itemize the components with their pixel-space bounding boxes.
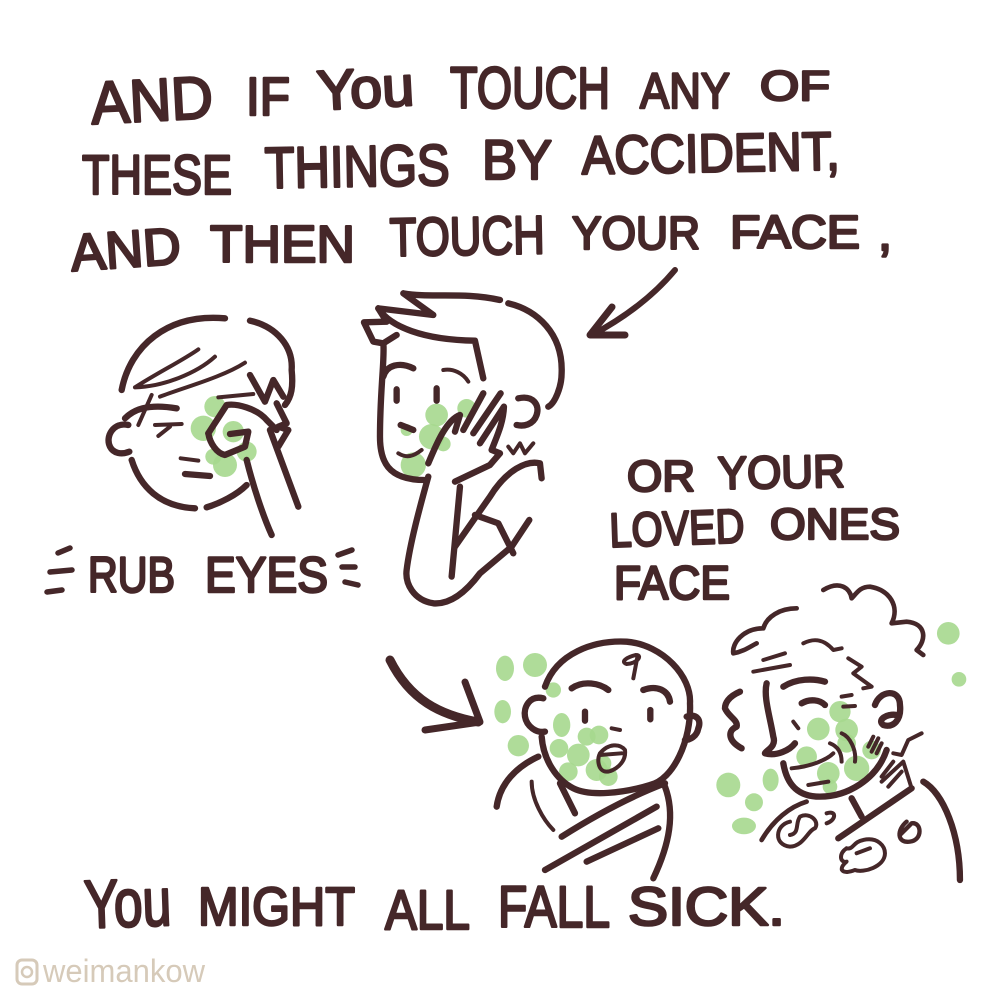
text: you might all fall sick: You	[83, 864, 172, 943]
heading: and if you touch any of these things by accident: AND	[69, 217, 183, 283]
text: or your loved ones face: YOUR	[717, 445, 845, 499]
heading: and if you touch any of these things by accident: AND	[89, 64, 215, 137]
text: you might all fall sick: MIGHT	[198, 877, 355, 937]
heading: and if you touch any of these things by accident: BY	[482, 128, 552, 191]
illustration: boy touching face	[364, 293, 562, 603]
text: or your loved ones face: ONES	[770, 500, 900, 549]
watermark: instagram handle: weimankow	[42, 953, 206, 989]
heading: and if you touch any of these things by accident: THESE	[82, 143, 232, 206]
illustration: person rubbing eyes	[109, 318, 298, 535]
text: or your loved ones face: FACE	[614, 556, 730, 609]
heading: and if you touch any of these things by accident: FACE	[730, 206, 860, 258]
heading: and if you touch any of these things by accident: ACCIDENT,	[581, 122, 840, 186]
heading: and if you touch any of these things by accident: OF	[760, 62, 830, 109]
text: or your loved ones face: OR	[627, 452, 695, 501]
heading: and if you touch any of these things by accident: IF	[246, 67, 290, 127]
text: you might all fall sick: FALL	[498, 875, 610, 940]
arrow: pointing to baby	[390, 660, 480, 730]
label: rub eyes	[47, 547, 358, 603]
heading: and if you touch any of these things by accident	[69, 54, 892, 283]
heading: and if you touch any of these things by accident: YOUR	[572, 207, 700, 259]
heading: and if you touch any of these things by accident: You	[315, 54, 415, 122]
text: or your loved ones face	[609, 445, 900, 609]
text: you might all fall sick: ALL	[385, 878, 470, 941]
heading: and if you touch any of these things by accident: ,	[878, 205, 892, 261]
heading: and if you touch any of these things by accident: THINGS	[264, 133, 450, 201]
illustration: baby with germs	[494, 642, 699, 878]
label: rub eyes: EYES	[205, 547, 328, 603]
heading: and if you touch any of these things by accident: TOUCH	[389, 205, 545, 268]
label: rub eyes: RUB	[88, 547, 175, 603]
heading: and if you touch any of these things by accident: THEN	[210, 216, 355, 274]
text: you might all fall sick: SICK.	[628, 877, 785, 937]
arrow: pointing to boy's face	[590, 270, 675, 335]
heading: and if you touch any of these things by accident: ANY	[640, 63, 730, 119]
illustration: older woman with germs	[716, 585, 966, 880]
text: or your loved ones face: LOVED	[609, 500, 745, 558]
text: you might all fall sick	[83, 864, 785, 943]
heading: and if you touch any of these things by accident: TOUCH	[450, 56, 610, 121]
